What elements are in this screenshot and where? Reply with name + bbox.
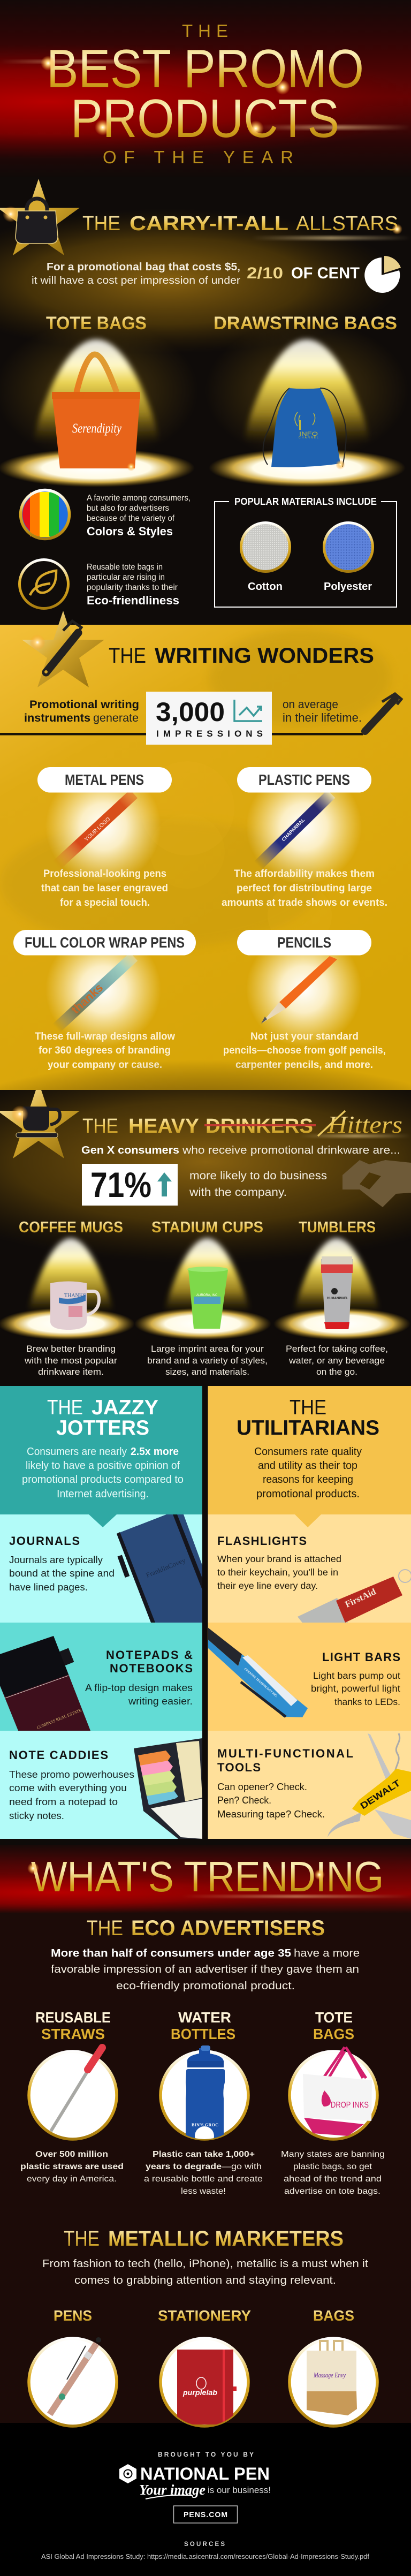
- heading: the utilitarians: UTILITARIANS: [237, 1416, 379, 1439]
- heading: multi-functional tools: MULTI-FUNCTIONAL: [217, 1747, 353, 1760]
- spotlight: mug: [0, 1238, 135, 1340]
- text: straws: [20, 2150, 124, 2184]
- image: red notebook in circle: [161, 2338, 248, 2426]
- text: note caddies: These promo powerhouses: [9, 1769, 134, 1780]
- image: wrap pen: [56, 957, 134, 1028]
- image: green cup: [187, 1267, 228, 1329]
- label: water bottles: [171, 2009, 235, 2042]
- label: reusable straws: [35, 2009, 111, 2042]
- heading: multi-functional tools: [217, 1747, 353, 1774]
- image: mug: THANKS: [64, 1293, 86, 1299]
- text: gen x consumers: Gen X consumers: [81, 1145, 179, 1156]
- icon: rising chart: [234, 700, 262, 721]
- heading: the writing wonders: THE: [109, 644, 146, 668]
- image: red flashlight: FirstAid: [344, 1586, 378, 1610]
- heading: the heavy drinkers hitters: Hitters: [327, 1111, 402, 1138]
- stat: 2/10 of cent: 2/10: [247, 264, 283, 282]
- image: tumbler: HUMANPIXEL: [327, 1297, 348, 1300]
- text: plastic pens: perfect for distributing large: [237, 883, 372, 894]
- heading: drawstring bags: DRAWSTRING BAGS: [214, 313, 397, 334]
- item: plastic pens: [222, 767, 387, 908]
- label: bags: BAGS: [313, 2307, 354, 2324]
- text: straws: Over 500 million: [35, 2150, 108, 2159]
- text: note caddies: come with everything you: [9, 1782, 127, 1793]
- pointer: [89, 1514, 117, 1527]
- text: tote bags: advertise on tote bags.: [284, 2187, 380, 2196]
- text: tumblers description: water, or any beverage: [288, 1356, 385, 1366]
- logo: national pen: [119, 2464, 271, 2499]
- text: eco-friendliness: Reusable tote bags in: [87, 563, 163, 572]
- text: colors and styles: because of the variety of: [87, 514, 175, 523]
- heading: multi-functional tools: TOOLS: [217, 1761, 261, 1774]
- text: more likely: more likely to do business: [189, 1170, 327, 1182]
- text: promotional writing instruments: instruments: [24, 712, 90, 724]
- text: eco-friendliness: popularity thanks to their: [87, 583, 178, 592]
- heading: light bars: LIGHT BARS: [322, 1650, 400, 1664]
- title: of the year: OF THE YEAR: [103, 147, 293, 167]
- text: eco advertisers: favorable impression of an advertiser if they gave them an: [51, 1963, 359, 1975]
- heading: the eco advertisers: ECO ADVERTISERS: [131, 1916, 325, 1940]
- text: notepads: A flip-top design makes: [85, 1682, 193, 1693]
- image: metallic bag in circle: [290, 2338, 377, 2426]
- heading: the jazzy jotters: THE: [47, 1396, 83, 1419]
- text: wrap pens: your company or cause.: [48, 1059, 162, 1071]
- text: promotional writing instruments: [24, 699, 139, 724]
- image: mug: [50, 1282, 99, 1330]
- label: cotton: Cotton: [248, 581, 283, 593]
- divider line with pen icon: [0, 694, 401, 736]
- text: eco advertisers: More than half of consumers under age 35: [51, 1947, 291, 1959]
- text: journals: bound at the spine and: [9, 1567, 115, 1579]
- icon: handshake: [342, 1160, 411, 1207]
- image: blue drawstring bag: [263, 388, 346, 469]
- image: navy pen: CHAPARRAL: [280, 817, 306, 842]
- pill: pencils: PENCILS: [277, 934, 331, 951]
- pill: full color wrap pens: FULL COLOR WRAP PENS: [25, 934, 185, 951]
- text: jazzy jotters: Internet advertising.: [57, 1488, 149, 1500]
- label: tote bags: BAGS: [313, 2026, 354, 2042]
- image: tote bag in circle: [290, 2047, 377, 2139]
- heading: flashlights: FLASHLIGHTS: [217, 1534, 307, 1548]
- text: plastic pens: amounts at trade shows or events.: [222, 897, 387, 908]
- button: pens.com: [173, 2506, 238, 2523]
- heading: sources: SOURCES: [184, 2541, 225, 2548]
- image: tumbler: [321, 1256, 353, 1329]
- logo: national pen: is our business!: [208, 2485, 271, 2495]
- spotlight: cup: [134, 1238, 271, 1340]
- label: reusable straws: REUSABLE: [35, 2009, 111, 2026]
- pill: pencils: [237, 930, 371, 955]
- heading: the heavy drinkers hitters: THE: [82, 1115, 118, 1138]
- pill: metal pens: METAL PENS: [65, 771, 144, 788]
- text: note caddies: need from a notepad to: [9, 1796, 118, 1807]
- heading: the carry-it-all allstars: [82, 213, 402, 235]
- image: red notebook in circle: purplelab: [182, 2389, 217, 2397]
- image: tote bag in circle: DROP INKS: [331, 2101, 369, 2110]
- heading: notepads and notebooks: NOTEPADS &: [106, 1648, 193, 1662]
- stat box: 71%: 71%: [90, 1165, 151, 1204]
- text: straws: every day in America.: [27, 2175, 117, 2184]
- icon: leaf circle: [19, 560, 68, 608]
- text: jazzy jotters: likely to have a positive opinion of: [26, 1460, 180, 1472]
- label: coffee mugs: COFFEE MUGS: [19, 1219, 123, 1236]
- heading: the utilitarians: THE: [290, 1396, 326, 1419]
- icon: star with bag: [0, 179, 80, 255]
- image: wrap pen: thanks: [68, 981, 105, 1017]
- text: eco advertisers: eco-friendly promotional product.: [116, 1980, 295, 1992]
- pill: plastic pens: PLASTIC PENS: [258, 771, 350, 788]
- text: bottles: years to degrade: [146, 2162, 222, 2171]
- icon: pie chart: [364, 256, 401, 293]
- text: multi-functional tools: Pen? Check.: [217, 1795, 271, 1806]
- image: pocket knife: [328, 1733, 411, 1839]
- spotlight: tumbler: [273, 1238, 410, 1340]
- text: tumblers description: [286, 1344, 388, 1377]
- label: tote bags: [313, 2009, 354, 2042]
- text: wrap pens: [35, 1031, 175, 1071]
- image: blue drawstring bag: INFO: [299, 431, 318, 437]
- text: multi-functional tools: Can opener? Check.: [217, 1782, 307, 1792]
- panel: popular materials: [215, 496, 397, 607]
- text: light bars: [311, 1670, 400, 1707]
- sparkles: [41, 56, 290, 137]
- pill: full color wrap pens: [13, 930, 196, 955]
- text: eco advertisers: have a more: [294, 1947, 360, 1959]
- heading: popular materials include: POPULAR MATERIALS INCLUDE: [234, 496, 377, 507]
- text: bottles: —go with: [222, 2162, 262, 2171]
- text: colors and styles: [87, 494, 191, 538]
- stat box: 3,000 impressions: [146, 692, 272, 745]
- item: full color wrap pens: [13, 930, 196, 1071]
- icon: star with pen: [22, 611, 104, 687]
- label: IMPRESSIONS: [156, 729, 263, 739]
- item: multi-functional tools: [208, 1731, 411, 1839]
- image: blue drawstring bag: CHANNEL: [299, 436, 318, 440]
- item: light bars: [208, 1623, 411, 1731]
- text: flashlights: their eye line every day.: [217, 1580, 318, 1591]
- text: journals: Journals are typically: [9, 1554, 103, 1565]
- panel: jazzy jotters: [0, 1386, 202, 1514]
- stat: 2/10 of cent: OF CENT: [291, 264, 360, 282]
- text: pencils: Not just your standard: [250, 1031, 359, 1042]
- text: on average: in their lifetime.: [283, 711, 362, 724]
- text: bottles: Plastic can take 1,000+: [153, 2150, 255, 2159]
- text: utilitarians: reasons for keeping: [263, 1474, 353, 1486]
- text: note caddies: [9, 1769, 134, 1821]
- heading: the jazzy jotters: JAZZY: [92, 1396, 158, 1419]
- text: tote bags: ahead of the trend and: [284, 2175, 382, 2184]
- text: coffee mugs description: drinkware item.: [38, 1367, 104, 1377]
- image: bottle in circle: BIN'S GROC: [192, 2123, 218, 2127]
- text: wrap pens: These full-wrap designs allow: [35, 1031, 175, 1042]
- text: pencils: [223, 1031, 386, 1071]
- text: colors and styles: but also for advertisers: [87, 504, 169, 513]
- text: journals: [9, 1554, 115, 1593]
- text: cost per impression: it will have a cost per impression of under: [32, 275, 241, 286]
- text: metal pens: Professional-looking pens: [43, 868, 166, 880]
- text: tumblers description: Perfect for taking coffee,: [286, 1344, 388, 1354]
- heading: tote bags: TOTE BAGS: [46, 313, 147, 334]
- text: eco advertisers: [51, 1947, 360, 1992]
- heading: the jazzy jotters: [47, 1396, 158, 1439]
- text: wrap pens: for 360 degrees of branding: [39, 1045, 171, 1056]
- image: orange tote bag: [52, 354, 140, 471]
- heading: the utilitarians: [237, 1396, 379, 1439]
- pill: metal pens: [37, 767, 172, 792]
- text: stadium cups description: brand and a variety of styles,: [147, 1356, 268, 1366]
- item: flashlights: [208, 1514, 411, 1627]
- text: tumblers description: on the go.: [316, 1367, 357, 1377]
- text: promotional writing instruments: generate: [93, 712, 139, 724]
- footer panel: [0, 2423, 411, 2576]
- text: plastic pens: [222, 868, 387, 908]
- item: notepads and notebooks: [0, 1623, 202, 1731]
- text: stadium cups description: sizes, and materials.: [165, 1367, 249, 1377]
- text: cost per impression: [32, 261, 241, 286]
- text: coffee mugs description: [24, 1344, 118, 1377]
- text: cost per impression: For a promotional bag that costs $5,: [47, 261, 240, 273]
- image: green cup: AURORA, INC: [196, 1294, 218, 1297]
- text: bottles: less waste!: [181, 2187, 226, 2196]
- text: multi-functional tools: Measuring tape? Check.: [217, 1809, 325, 1820]
- heading: the carry-it-all allstars: ALLSTARS: [296, 213, 398, 235]
- panel: heavy hitters: [0, 1060, 411, 1386]
- image: blue light bar: [208, 1627, 308, 1717]
- text: metal pens: for a special touch.: [60, 897, 150, 908]
- text: eco-friendliness: Eco-friendliness: [87, 594, 179, 607]
- text: bottles: a reusable bottle and create: [144, 2175, 263, 2184]
- text: colors and styles: A favorite among consumers,: [87, 494, 191, 503]
- pill: plastic pens: [237, 767, 371, 792]
- text: utilitarians: promotional products.: [256, 1488, 360, 1500]
- image: red pen: YOUR LOGO: [84, 816, 112, 843]
- text: eco-friendliness: particular are rising in: [87, 573, 165, 582]
- text: metal pens: [41, 868, 168, 908]
- pointer: [295, 1514, 321, 1527]
- image: metallic pen in circle: [29, 2337, 117, 2426]
- text: utilitarians: and utility as their top: [258, 1460, 357, 1472]
- text: stadium cups description: [147, 1344, 268, 1377]
- text: plastic pens: The affordability makes them: [234, 868, 375, 880]
- text: note caddies: sticky notes.: [9, 1810, 64, 1821]
- panel: utilitarians: [208, 1386, 411, 1514]
- item: journals: [0, 1514, 202, 1623]
- text: more likely: with the company.: [189, 1186, 287, 1199]
- heading: the eco advertisers: THE: [87, 1916, 123, 1940]
- heading: the heavy drinkers hitters: DRINKERS: [206, 1115, 313, 1138]
- text: utilitarians: Consumers rate quality: [254, 1446, 362, 1458]
- image: blue light bar: CREATIVE TECHNOLOGY INC.: [243, 1668, 278, 1698]
- image: navy journal: FranklinCovey: [145, 1556, 187, 1579]
- text: coffee mugs description: Brew better branding: [26, 1344, 116, 1354]
- label: pens: PENS: [54, 2307, 92, 2324]
- heading: notepads and notebooks: [106, 1648, 193, 1675]
- heading: the metallic marketers: METALLIC MARKETERS: [108, 2227, 344, 2251]
- panel: carry-it-all allstars: [0, 179, 411, 608]
- heading: the writing wonders: WRITING WONDERS: [155, 644, 374, 668]
- image: notepad: [0, 1636, 90, 1731]
- text: flashlights: [217, 1554, 341, 1591]
- text: pencils: pencils—choose from golf pencils,: [223, 1045, 386, 1056]
- text: gen x consumers: who receive promotional drinkware are...: [182, 1145, 400, 1156]
- label: water bottles: BOTTLES: [171, 2026, 235, 2042]
- image: red flashlight: [298, 1570, 411, 1627]
- number: 3,000: [156, 697, 225, 727]
- image: notepad: COMPASS REAL ESTATE: [36, 1708, 82, 1730]
- text: metallic marketers: [42, 2257, 368, 2286]
- heading: the metallic marketers: THE: [64, 2227, 100, 2251]
- text: light bars: bright, powerful light: [311, 1683, 400, 1694]
- image: orange tote bag: Serendipity: [72, 421, 122, 436]
- title: the: THE: [182, 21, 228, 41]
- text: flashlights: When your brand is attached: [217, 1554, 341, 1564]
- text: tote bags: plastic bags, so get: [293, 2162, 372, 2171]
- heading: note caddies: NOTE CADDIES: [9, 1748, 108, 1762]
- text: utilitarians: [254, 1446, 362, 1500]
- image: note caddy: [134, 1738, 202, 1839]
- text: notepads: writing easier.: [128, 1695, 193, 1707]
- swatch: cotton: [241, 522, 290, 572]
- text: coffee mugs description: with the most popular: [24, 1356, 118, 1366]
- text: on average: [283, 698, 362, 724]
- icon: rainbow colors circle: [20, 490, 70, 539]
- icon: teal arrow: [157, 1172, 172, 1196]
- image: orange pencil: [261, 956, 337, 1024]
- heading: the carry-it-all allstars: THE: [82, 213, 120, 235]
- title: best promo: BEST PROMO: [47, 39, 364, 99]
- image: straw in circle: [29, 2048, 117, 2139]
- label: tote bags: TOTE: [315, 2009, 353, 2026]
- hero panel: [0, 0, 411, 177]
- text: jazzy jotters: 2.5x more: [131, 1446, 179, 1458]
- text: bottles: [144, 2150, 263, 2196]
- text: light bars: thanks to LEDs.: [334, 1696, 400, 1707]
- image: red pen: [56, 794, 134, 866]
- text: flashlights: to their keychain, you'll be in: [217, 1567, 338, 1578]
- label: water bottles: WATER: [178, 2009, 231, 2026]
- text: notepads: [85, 1682, 193, 1707]
- logo: national pen: Your image: [139, 2482, 206, 2498]
- text: tote bags: [281, 2150, 385, 2196]
- panel: writing wonders: [0, 611, 411, 1090]
- swatch: polyester: [324, 522, 372, 572]
- heading: notepads and notebooks: NOTEBOOKS: [110, 1662, 193, 1675]
- text: metal pens: that can be laser engraved: [41, 883, 168, 894]
- title: products: PRODUCTS: [71, 89, 339, 149]
- text: on average: on average: [283, 698, 338, 711]
- text: jazzy jotters: Consumers are nearly: [27, 1446, 127, 1458]
- text: jazzy jotters: [22, 1446, 184, 1500]
- text: jazzy jotters: promotional products compared to: [22, 1474, 184, 1486]
- text: gen x consumers: [81, 1145, 400, 1156]
- text: tote bags: Many states are banning: [281, 2150, 385, 2159]
- heading: the carry-it-all allstars: CARRY-IT-ALL: [130, 213, 288, 235]
- sparkles: [27, 1862, 325, 1880]
- image: pocket knife: DEWALT: [359, 1778, 402, 1811]
- label: tumblers: TUMBLERS: [299, 1219, 376, 1236]
- text: metallic marketers: From fashion to tech (hello, iPhone), metallic is a must when it: [42, 2257, 368, 2270]
- stat: 2/10 of cent: [247, 264, 360, 282]
- text: more likely: [189, 1170, 327, 1199]
- label: stadium cups: STADIUM CUPS: [151, 1219, 263, 1236]
- label: polyester: Polyester: [324, 581, 372, 593]
- text: metallic marketers: comes to grabbing attention and staying relevant.: [74, 2274, 336, 2286]
- label: reusable straws: STRAWS: [41, 2026, 105, 2042]
- item: note caddies: [0, 1731, 202, 1839]
- text: eco-friendliness: [87, 563, 179, 607]
- text: source citation: ASI Global Ad Impressions Study: https://media.asicentral.com/resources/Global-Ad-Impressions-Study.pdf: [41, 2552, 369, 2560]
- panel: what's trending: [0, 1845, 411, 2423]
- heading: the jazzy jotters: JOTTERS: [56, 1416, 149, 1439]
- label: stationery: STATIONERY: [158, 2307, 251, 2324]
- heading: journals: JOURNALS: [9, 1534, 80, 1548]
- image: bottle in circle: [161, 2045, 248, 2146]
- item: metal pens: [37, 767, 172, 908]
- icon: star with mug: [0, 1090, 80, 1158]
- logo: national pen: NATIONAL PEN: [140, 2464, 270, 2483]
- text: promotional writing instruments: Promotional writing: [29, 699, 139, 711]
- heading: the heavy drinkers hitters: HEAVY: [128, 1115, 199, 1138]
- heading: brought to you by: BROUGHT TO YOU BY: [158, 2451, 254, 2458]
- spotlight: drawstring: [205, 321, 408, 487]
- item: pencils: [223, 930, 386, 1071]
- text: journals: have lined pages.: [9, 1581, 88, 1593]
- heading: the heavy drinkers hitters: [82, 1111, 402, 1138]
- text: light bars: Light bars pump out: [313, 1670, 400, 1681]
- image: navy pen: [258, 794, 331, 866]
- text: multi-functional tools: [217, 1782, 325, 1820]
- text: pencils: carpenter pencils, and more.: [235, 1059, 373, 1071]
- text: stadium cups description: Large imprint area for your: [151, 1344, 264, 1354]
- text: straws: plastic straws are used: [20, 2162, 124, 2171]
- text: colors and styles: Colors & Styles: [87, 525, 173, 538]
- button: pens.com: PENS.COM: [184, 2510, 227, 2519]
- spotlight: tote: [0, 321, 198, 487]
- image: metallic bag in circle: Massage Envy: [313, 2371, 346, 2379]
- image: navy journal: [117, 1514, 202, 1623]
